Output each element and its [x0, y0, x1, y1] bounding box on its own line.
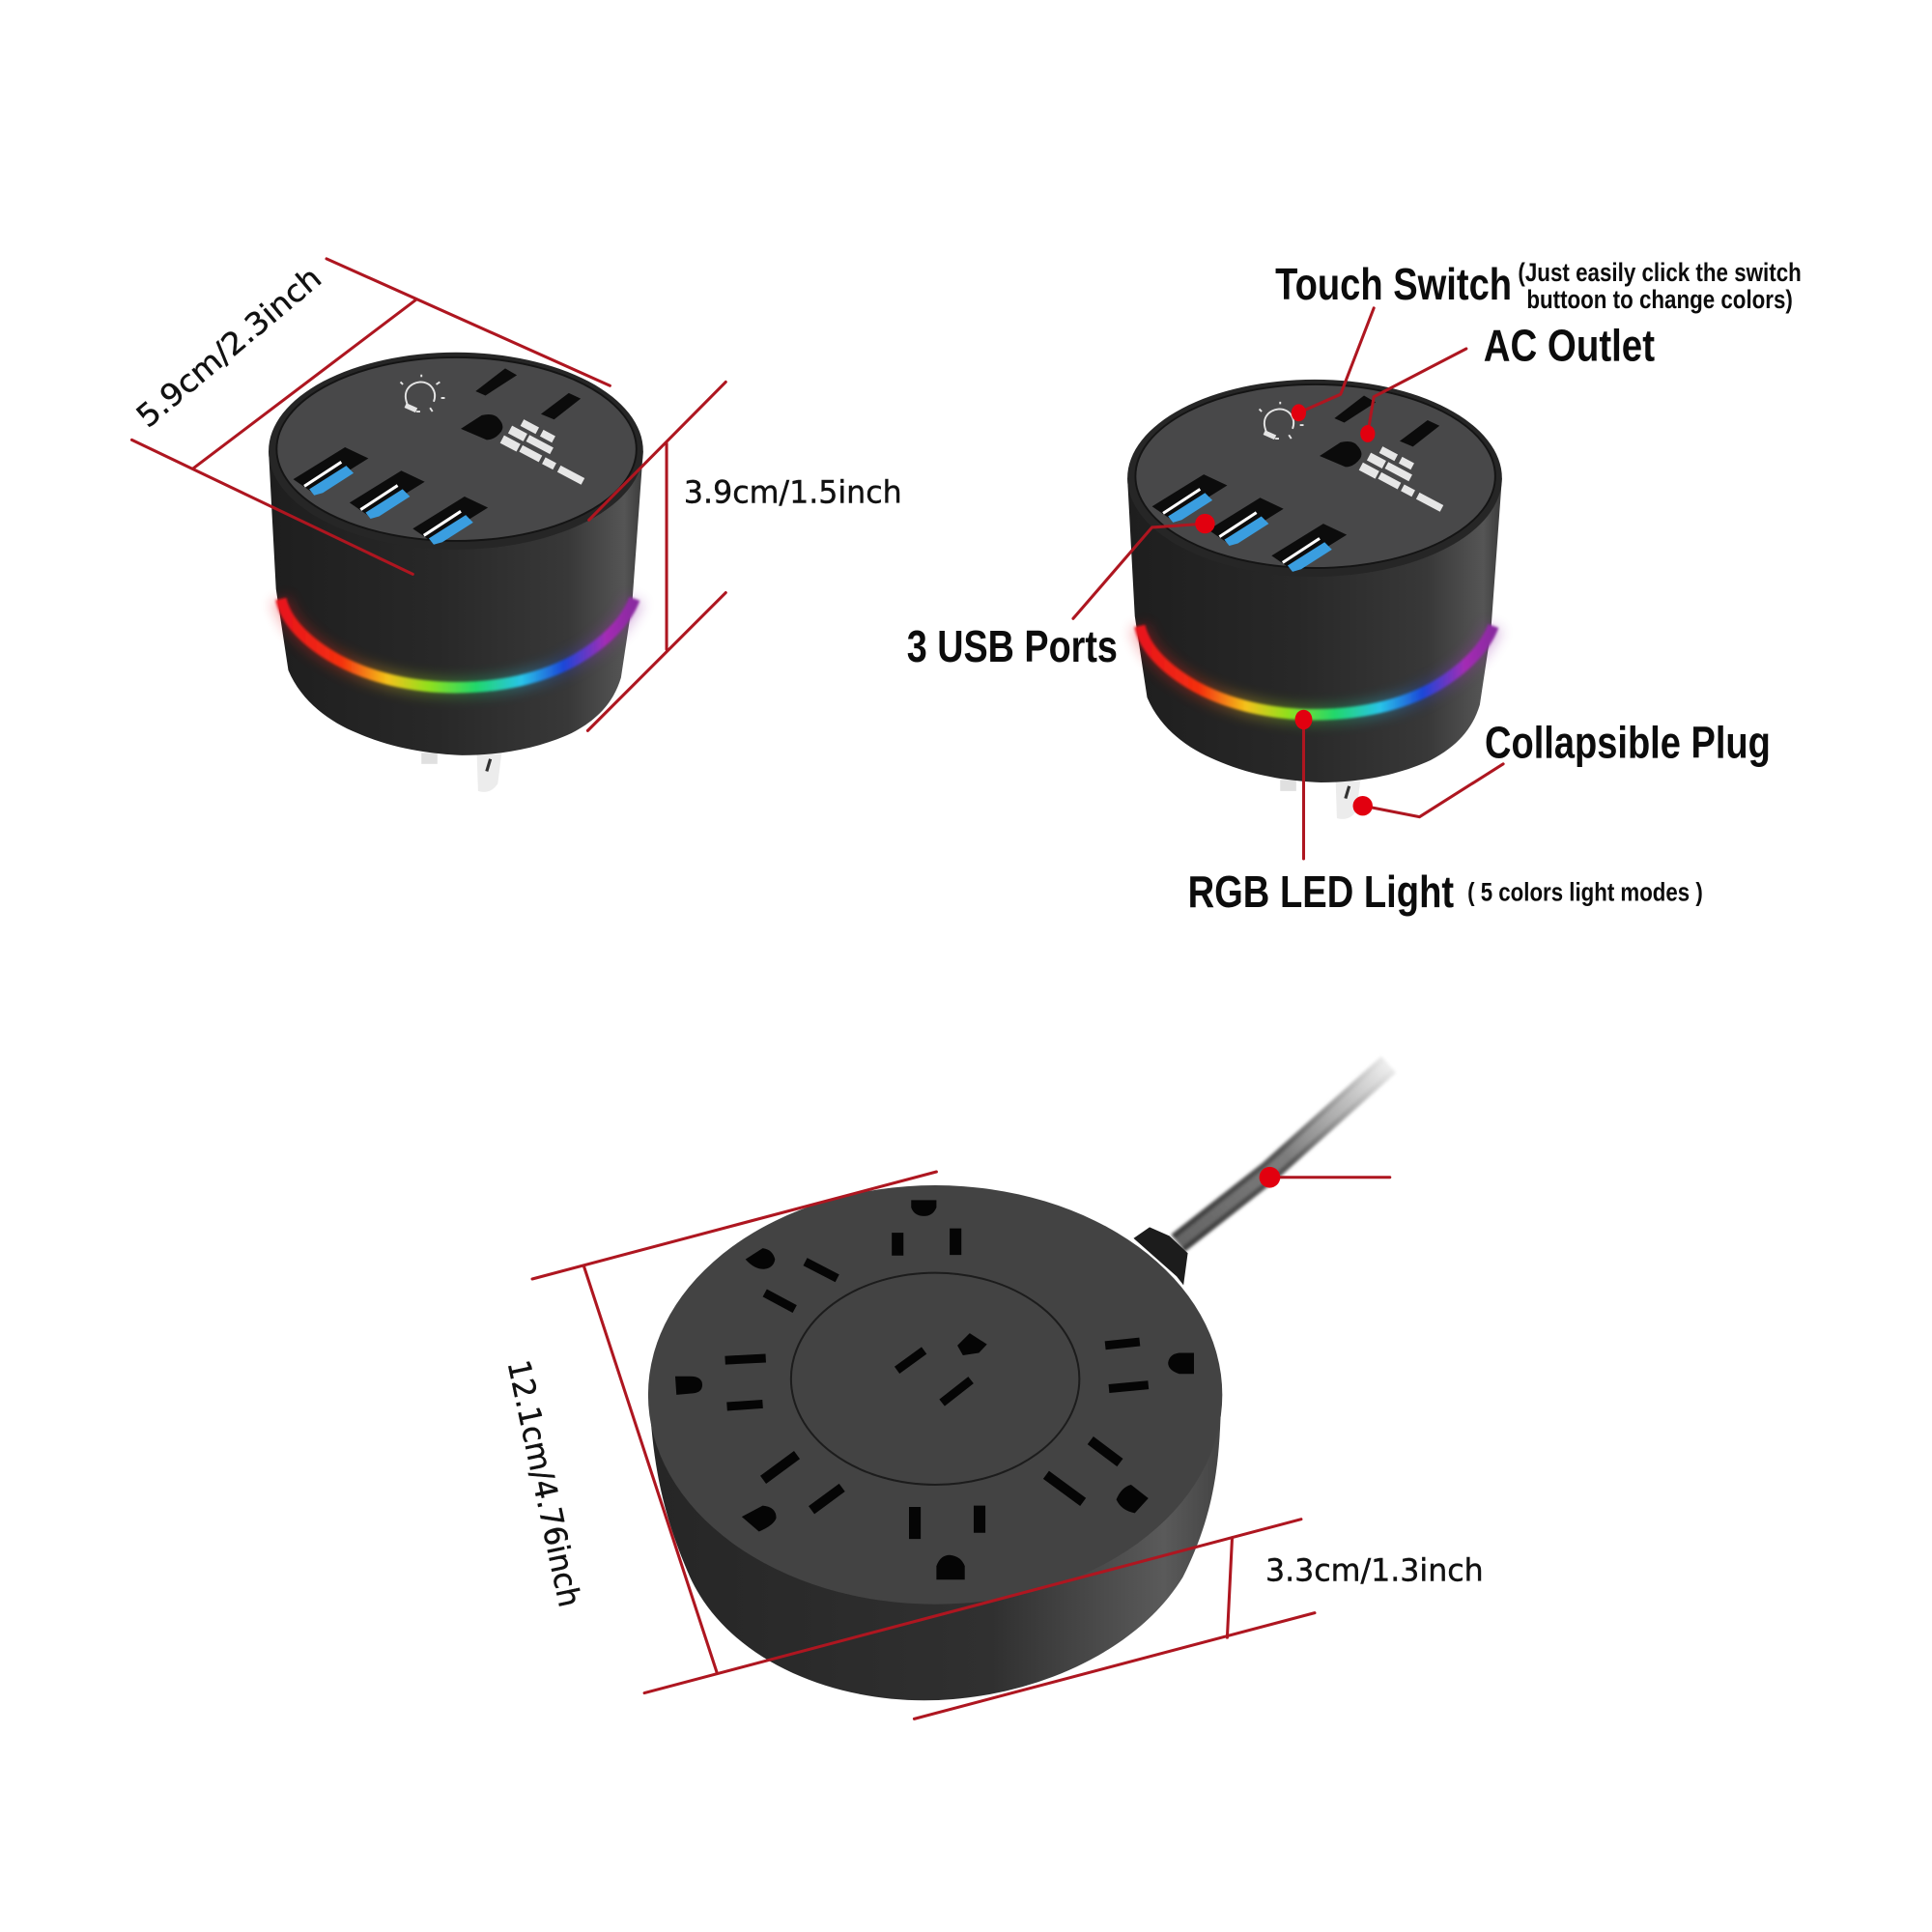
outlet: bottom: [915, 1506, 980, 1579]
outlet: upper left: [746, 1248, 838, 1309]
callout: USB ports: 3 USB Ports: [907, 621, 1118, 671]
center puck: [791, 1273, 1079, 1485]
outlet: lower right: [1046, 1440, 1149, 1513]
adapter illustration: [1127, 380, 1502, 819]
icon: touch switch lamp: [401, 375, 444, 412]
callout: touch switch: Touch Switch: [1275, 259, 1512, 309]
callout: touch switch: buttoon to change colors): [1526, 285, 1793, 314]
rainbow LED ring: [281, 599, 635, 688]
callout: RGB LED light: ( 5 colors light modes ): [1467, 877, 1703, 906]
callout: USB ports: [907, 514, 1215, 671]
AC outlet: [461, 368, 581, 440]
label: width: 5.9cm/2.3inch: [129, 259, 328, 435]
cable callout: [1260, 1167, 1390, 1188]
dimension: height lines: [587, 382, 725, 730]
rating label: [500, 414, 596, 486]
plug prongs: [421, 753, 501, 792]
callout: touch switch: [1275, 258, 1802, 421]
callout: AC outlet: AC Outlet: [1484, 321, 1655, 371]
cylinder body: [269, 451, 643, 755]
USB ports: [294, 447, 488, 545]
label: thickness: 3.3cm/1.3inch: [1265, 1551, 1484, 1588]
dimension: diameter lines: [532, 1172, 936, 1673]
device: adapter with feature callouts: [907, 258, 1802, 917]
callout: touch switch: (Just easily click the switch: [1518, 258, 1802, 287]
label: height: 3.9cm/1.5inch: [684, 473, 902, 510]
outlet: right: [1105, 1342, 1194, 1389]
callout: RGB LED light: RGB LED Light: [1188, 867, 1454, 917]
label: diameter: 12.1cm/4.76inch: [500, 1356, 588, 1610]
callout: AC outlet: [1360, 321, 1655, 442]
strip body: [649, 1399, 1221, 1700]
dimension: thickness lines: [644, 1520, 1315, 1719]
device: adapter with dimensions: [129, 259, 902, 792]
dimension: width lines: [131, 259, 610, 574]
cable strain relief: [1133, 1227, 1188, 1285]
power cable: [1178, 1065, 1389, 1243]
ring outlets: [675, 1200, 1194, 1579]
outlet: left: [675, 1358, 766, 1406]
callout: RGB LED light: [1188, 710, 1703, 917]
outlet: lower left: [742, 1455, 842, 1531]
callout: collapsible plug: [1353, 717, 1771, 817]
outlet: top: [897, 1200, 955, 1256]
callout: collapsible plug: Collapsible Plug: [1485, 717, 1771, 767]
device: round power strip with dimensions: [500, 1065, 1484, 1719]
top face: [648, 1185, 1222, 1605]
top face: [269, 353, 643, 550]
